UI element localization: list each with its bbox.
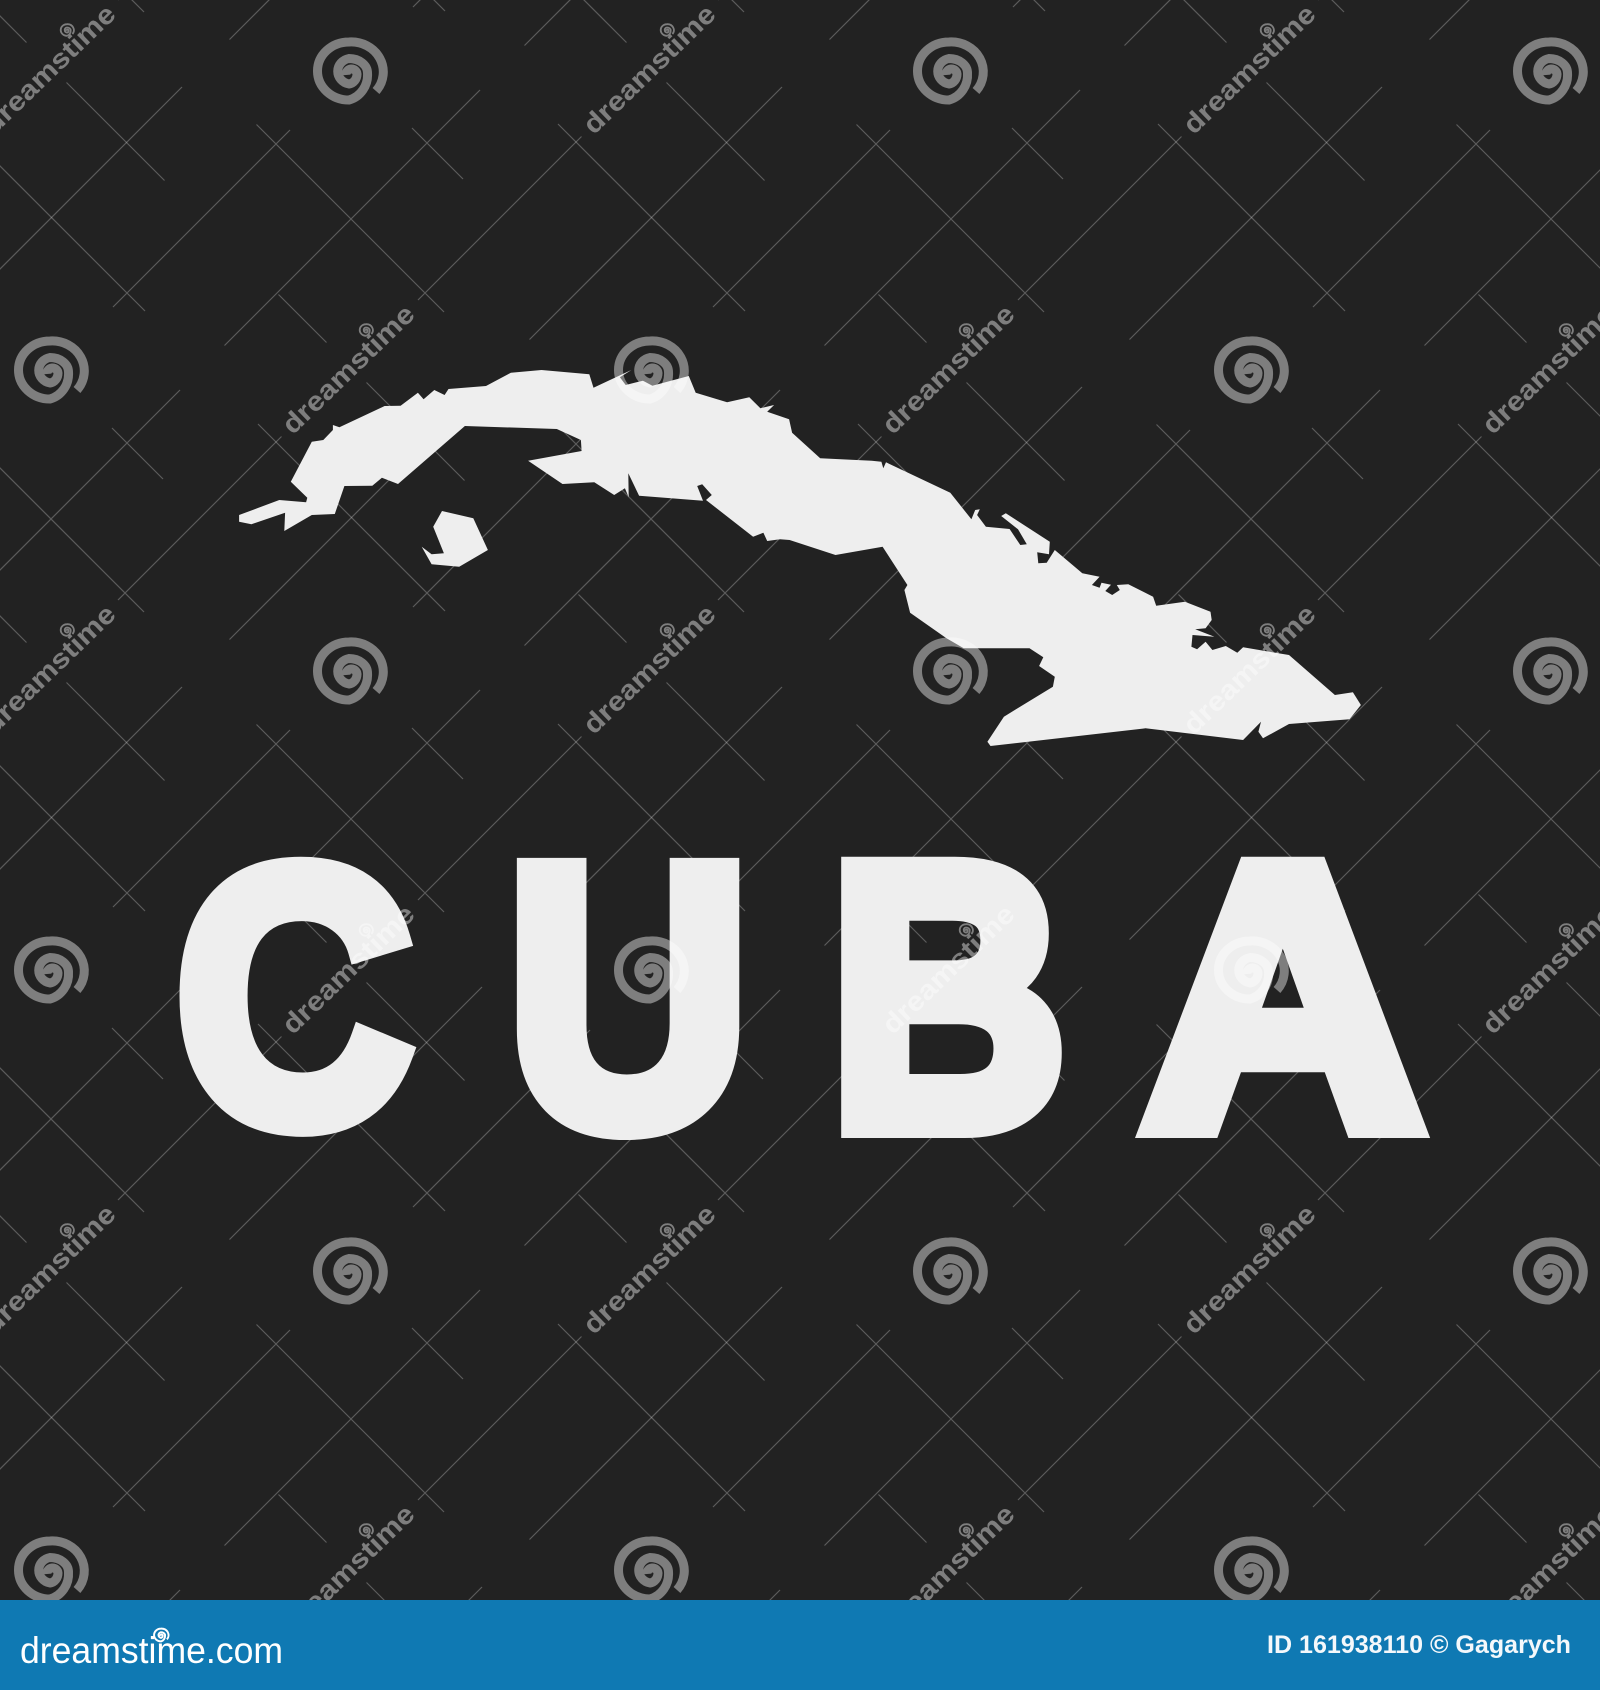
watermark pattern: dreamstime bbox=[876, 899, 1021, 1040]
title: CUBA: A bbox=[1143, 787, 1423, 1206]
watermark pattern: dreamstime bbox=[876, 299, 1021, 440]
watermark pattern: dreamstime bbox=[1177, 0, 1322, 140]
footer bar bbox=[0, 1600, 1600, 1690]
watermark pattern: dreamstime bbox=[276, 299, 421, 440]
title: CUBA: B bbox=[830, 789, 1066, 1206]
watermark pattern: dreamstime bbox=[276, 899, 421, 1040]
watermark pattern: dreamstime bbox=[1177, 1199, 1322, 1340]
watermark pattern: dreamstime bbox=[577, 1199, 722, 1340]
watermark pattern: dreamstime bbox=[1177, 599, 1322, 740]
watermark pattern: dreamstime bbox=[577, 599, 722, 740]
watermark pattern: dreamstime bbox=[577, 0, 722, 140]
footer image id and credit: ID 161938110 © Gagarych bbox=[1267, 1631, 1571, 1659]
footer logo text: dreamstime.com bbox=[20, 1630, 283, 1671]
title: CUBA bbox=[177, 787, 1423, 1206]
watermark pattern: dreamstime bbox=[876, 1499, 1021, 1640]
title: CUBA: C bbox=[177, 794, 412, 1200]
watermark pattern: dreamstime bbox=[276, 1499, 421, 1640]
title: CUBA: U bbox=[508, 790, 749, 1203]
map of Cuba bbox=[239, 370, 1361, 746]
